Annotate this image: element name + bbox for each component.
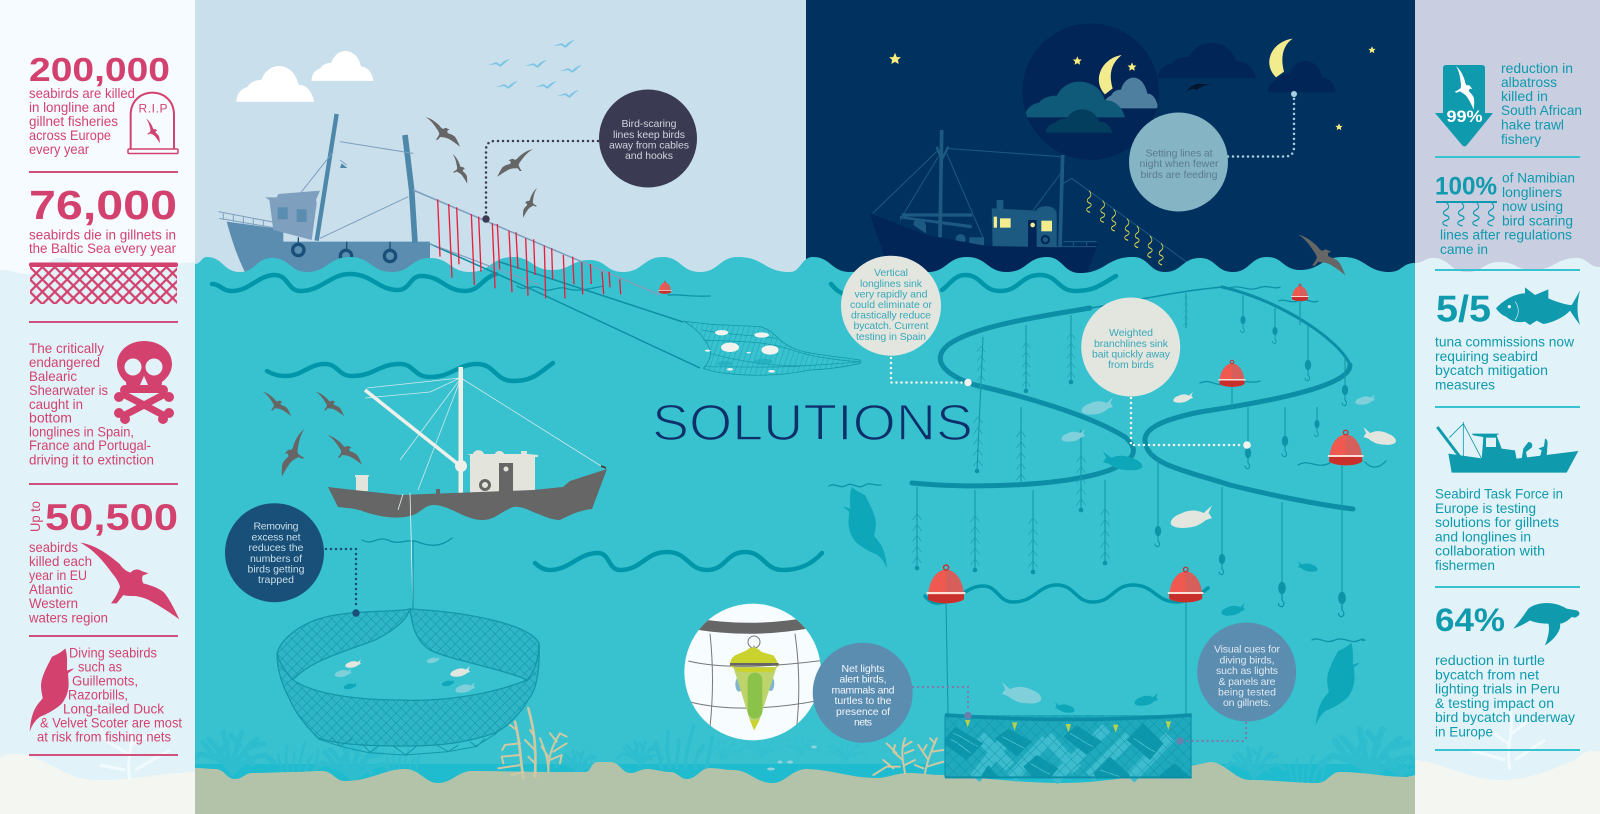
right stat: 100% Namibian bbox=[1435, 170, 1575, 257]
right stat: task force: and longlines in bbox=[1435, 528, 1531, 544]
left stat: 200,000 bbox=[29, 51, 170, 157]
right stat: 100% Namibian: of Namibian bbox=[1502, 170, 1575, 186]
right stat: 64% turtles: & testing impact on bbox=[1435, 695, 1554, 711]
divider bbox=[1435, 156, 1580, 158]
background: left panel bbox=[0, 0, 195, 814]
callout: removing excess net: trapped bbox=[258, 574, 294, 586]
right stat: albatross reduction: reduction in bbox=[1501, 60, 1573, 76]
net light vignette bbox=[684, 604, 823, 740]
left stat: 76,000: the Baltic Sea every year bbox=[29, 240, 176, 256]
callout: visual cues: such as lights bbox=[1216, 665, 1278, 677]
left stat: 76,000: seabirds die in gillnets in bbox=[29, 226, 176, 242]
main longline curves bbox=[912, 287, 1353, 509]
right stat: task force: Europe is testing bbox=[1435, 500, 1536, 516]
right stat: 5/5 tuna bbox=[1435, 289, 1575, 392]
right stat: albatross reduction: albatross bbox=[1501, 74, 1557, 90]
left stat: 50,500: waters region bbox=[28, 610, 108, 626]
right stat: 100% Namibian: bird scaring bbox=[1502, 212, 1573, 228]
right stat: albatross reduction: fishery bbox=[1501, 131, 1541, 147]
title: SOLUTIONS bbox=[652, 394, 973, 451]
left stat: diving seabirds: Diving seabirds bbox=[69, 645, 157, 661]
gillnet with panels and lights bbox=[945, 715, 1192, 780]
callout: removing excess net: Removing bbox=[254, 521, 299, 533]
right stat: task force: solutions for gillnets bbox=[1435, 514, 1559, 530]
callout: weighted branchlines: bait quickly away bbox=[1092, 348, 1171, 360]
right stat: albatross reduction bbox=[1501, 60, 1582, 147]
right stat: 64% turtles bbox=[1435, 602, 1575, 740]
sea bbox=[195, 257, 1415, 800]
callout: night setting bbox=[1129, 91, 1297, 212]
callout: vertical longlines: testing in Spain bbox=[856, 331, 926, 343]
callout: night setting: night when fewer bbox=[1140, 158, 1219, 170]
icon: tuna bbox=[1496, 287, 1580, 325]
right stat: albatross reduction: hake trawl bbox=[1501, 116, 1564, 132]
left stat: Balearic Shearwater: The critically bbox=[29, 340, 104, 356]
left stat: Balearic Shearwater: driving it to extinction bbox=[29, 452, 154, 468]
moon vignette bbox=[1022, 23, 1159, 160]
icon: RIP tombstone bbox=[128, 93, 178, 154]
chevron weights bbox=[912, 296, 1189, 567]
callout: visual cues: diving birds, bbox=[1220, 654, 1274, 666]
callout: vertical longlines: very rapidly and bbox=[854, 288, 928, 300]
callout: vertical longlines: bycatch. Current bbox=[854, 320, 929, 332]
callout: net lights: alert birds, bbox=[840, 674, 886, 686]
divider bbox=[29, 171, 178, 173]
small gulls bbox=[488, 40, 582, 98]
icon: turtle bbox=[1513, 603, 1579, 645]
left stat: diving seabirds: Long-tailed Duck bbox=[63, 701, 165, 717]
dark wave strokes bbox=[212, 274, 1208, 603]
callout: weighted branchlines: branchlines sink bbox=[1094, 338, 1169, 350]
callout: net lights bbox=[813, 643, 972, 743]
left stat: 50,500: killed each bbox=[29, 553, 92, 569]
left stat: Balearic Shearwater: bottom bbox=[29, 410, 72, 426]
callout: net lights: nets bbox=[854, 716, 872, 728]
clouds: day bbox=[236, 51, 374, 102]
left stat: 50,500: seabirds bbox=[29, 539, 78, 555]
right stat: 64% turtles: 64% bbox=[1435, 602, 1505, 638]
icon: diving seabird bbox=[30, 648, 74, 732]
left stat: 200,000: in longline and bbox=[29, 99, 115, 115]
callout: vertical longlines: Vertical bbox=[874, 267, 908, 279]
right stat: task force: Seabird Task Force in bbox=[1435, 486, 1563, 502]
faint coral in side panels bbox=[100, 710, 1545, 780]
left stat: 200,000: 200,000 bbox=[29, 51, 170, 88]
callout: weighted branchlines bbox=[1081, 298, 1251, 449]
right stat: albatross reduction: South African bbox=[1501, 102, 1582, 118]
left stat: 50,500: year in EU bbox=[29, 567, 87, 583]
branchlines with baited hooks bbox=[917, 293, 1345, 714]
icon: skull and crossbones bbox=[114, 341, 174, 424]
divider bbox=[29, 483, 178, 485]
left stat: 200,000: seabirds are killed bbox=[29, 85, 135, 101]
right stat: albatross reduction: killed in bbox=[1501, 88, 1548, 104]
right stat: 5/5 tuna: bycatch mitigation bbox=[1435, 362, 1548, 378]
left stat: Balearic Shearwater: longlines in Spain, bbox=[29, 424, 134, 440]
background: night sky bbox=[806, 0, 1415, 300]
left stat: Balearic Shearwater: caught in bbox=[29, 396, 83, 412]
callout: net lights: Net lights bbox=[842, 663, 884, 675]
icon: 99% arrow bbox=[1435, 65, 1493, 146]
callout: net lights: presence of bbox=[836, 706, 890, 718]
thin surface waves bbox=[362, 286, 1386, 642]
left stat: diving seabirds: Razorbills, bbox=[68, 687, 128, 703]
callout: removing excess net: excess net bbox=[252, 531, 301, 543]
right stat: 5/5 tuna: measures bbox=[1435, 376, 1495, 392]
left stat: diving seabirds: such as bbox=[78, 659, 122, 675]
trawl net with fish bbox=[683, 321, 861, 375]
icon: scaring streamers bbox=[1443, 202, 1494, 226]
left stat: Balearic Shearwater: Shearwater is bbox=[29, 382, 108, 398]
callout: net lights: turtles to the bbox=[834, 695, 892, 707]
right stat: 5/5 tuna: tuna commissions now bbox=[1435, 334, 1575, 350]
background: right panel bbox=[1415, 0, 1600, 814]
callout: bird-scaring lines: and hooks bbox=[625, 150, 673, 162]
callout: night setting: birds are feeding bbox=[1140, 169, 1218, 181]
right stat: 100% Namibian: longliners bbox=[1502, 184, 1562, 200]
night stars, moon and clouds bbox=[889, 39, 1376, 130]
icon: gillnet bbox=[29, 262, 178, 304]
callout: weighted branchlines: from birds bbox=[1108, 359, 1154, 371]
divider bbox=[1435, 269, 1580, 271]
divider bbox=[29, 635, 178, 637]
callout: removing excess net: reduces the bbox=[248, 542, 304, 554]
purse seine foot rope bbox=[315, 733, 497, 755]
divider bbox=[29, 754, 178, 756]
diving birds bbox=[843, 487, 1360, 725]
callout: removing excess net: birds getting bbox=[248, 564, 305, 576]
sand seabed bbox=[195, 762, 1415, 814]
right stat: 64% turtles: lighting trials in Peru bbox=[1435, 681, 1560, 697]
left stat: 50,500: Atlantic bbox=[29, 581, 73, 597]
left stat: 50,500 bbox=[27, 497, 178, 626]
right stat: task force: collaboration with bbox=[1435, 542, 1545, 558]
callout: bird-scaring lines: lines keep birds bbox=[613, 129, 685, 141]
icon: task force boat bbox=[1437, 422, 1578, 473]
callout: net lights: mammals and bbox=[832, 684, 895, 696]
coral cluster center bbox=[873, 738, 943, 775]
divider bbox=[1435, 586, 1580, 588]
icon: albatross bbox=[80, 543, 179, 619]
right stat: 64% turtles: bycatch from net bbox=[1435, 666, 1539, 682]
purse seine net bbox=[277, 609, 539, 746]
callout: vertical longlines: could eliminate or bbox=[850, 299, 932, 311]
left stat: diving seabirds bbox=[37, 645, 182, 745]
left stat: 50,500: 50,500 bbox=[45, 497, 178, 538]
callout: visual cues: Visual cues for bbox=[1214, 644, 1280, 656]
callout: visual cues bbox=[1176, 622, 1296, 745]
left stat: Balearic Shearwater bbox=[29, 340, 154, 468]
left stat: 200,000: across Europe bbox=[29, 127, 111, 143]
callout: vertical longlines: longlines sink bbox=[860, 278, 923, 290]
left stat: 200,000: gillnet fisheries bbox=[29, 113, 118, 129]
left stat: 76,000: 76,000 bbox=[29, 182, 177, 228]
left stat: Balearic Shearwater: France and Portugal- bbox=[29, 437, 151, 453]
callout: vertical longlines bbox=[841, 256, 972, 386]
grey birds: day bbox=[261, 117, 1347, 477]
left stat: Balearic Shearwater: Balearic bbox=[29, 368, 77, 384]
left stat: diving seabirds: & Velvet Scoter are most bbox=[40, 715, 182, 731]
bird-scaring line with streamers bbox=[413, 190, 700, 368]
callout: weighted branchlines: Weighted bbox=[1109, 327, 1153, 339]
right stat: 64% turtles: bird bycatch underway bbox=[1435, 709, 1575, 725]
callout: bird-scaring lines bbox=[482, 90, 697, 223]
right stat: 64% turtles: in Europe bbox=[1435, 724, 1493, 740]
left stat: Balearic Shearwater: endangered bbox=[29, 354, 100, 370]
icon: 99% arrow: 99% bbox=[1446, 107, 1482, 126]
coral cluster left bbox=[498, 708, 567, 778]
boat: night setter bbox=[870, 130, 1200, 273]
callout: visual cues: on gillnets. bbox=[1223, 697, 1271, 709]
right stat: 100% Namibian: 100% bbox=[1435, 173, 1497, 201]
callout: vertical longlines: drastically reduce bbox=[851, 310, 931, 322]
right stat: 100% Namibian: lines after regulations bbox=[1440, 227, 1572, 243]
right stat: 5/5 tuna: 5/5 bbox=[1436, 289, 1491, 330]
left stat: 50,500: Western bbox=[29, 595, 78, 611]
callout: bird-scaring lines: Bird-scaring bbox=[622, 118, 677, 130]
right stat: 5/5 tuna: requiring seabird bbox=[1435, 348, 1538, 364]
right stat: 100% Namibian: came in bbox=[1440, 241, 1488, 257]
callout: visual cues: being tested bbox=[1218, 686, 1276, 698]
small buoy bbox=[659, 281, 671, 294]
fish bbox=[1002, 392, 1396, 713]
right stat: 100% Namibian: now using bbox=[1502, 198, 1563, 214]
fish inside purse seine bbox=[335, 656, 475, 693]
callout: visual cues: & panels are bbox=[1218, 676, 1276, 688]
left stat: 76,000 bbox=[29, 182, 177, 256]
left stat: 50,500: Up to bbox=[27, 501, 43, 532]
left stat: diving seabirds: at risk from fishing nets bbox=[37, 729, 171, 745]
callout: removing excess net: numbers of bbox=[250, 553, 302, 565]
boat: bird-scaring longliner bbox=[218, 114, 430, 287]
icon: RIP tombstone: R.I.P bbox=[138, 102, 168, 116]
right stat: task force: fishermen bbox=[1435, 557, 1495, 573]
right stat: task force bbox=[1435, 486, 1563, 573]
callout: removing excess net bbox=[225, 503, 360, 617]
callout: bird-scaring lines: away from cables bbox=[609, 140, 689, 152]
red buoys bbox=[927, 284, 1364, 603]
divider bbox=[29, 321, 178, 323]
right stat: 64% turtles: reduction in turtle bbox=[1435, 652, 1545, 668]
yellow scaring streamers bbox=[1087, 191, 1163, 265]
left stat: diving seabirds: Guillemots, bbox=[72, 673, 138, 689]
divider bbox=[1435, 406, 1580, 408]
seabed corals silhouette bbox=[191, 726, 1421, 794]
divider bbox=[1435, 749, 1580, 751]
left stat: 200,000: every year bbox=[29, 141, 89, 157]
background: day sky bbox=[195, 0, 806, 300]
boat: net hauler bbox=[328, 367, 607, 610]
callout: night setting: Setting lines at bbox=[1146, 148, 1213, 160]
